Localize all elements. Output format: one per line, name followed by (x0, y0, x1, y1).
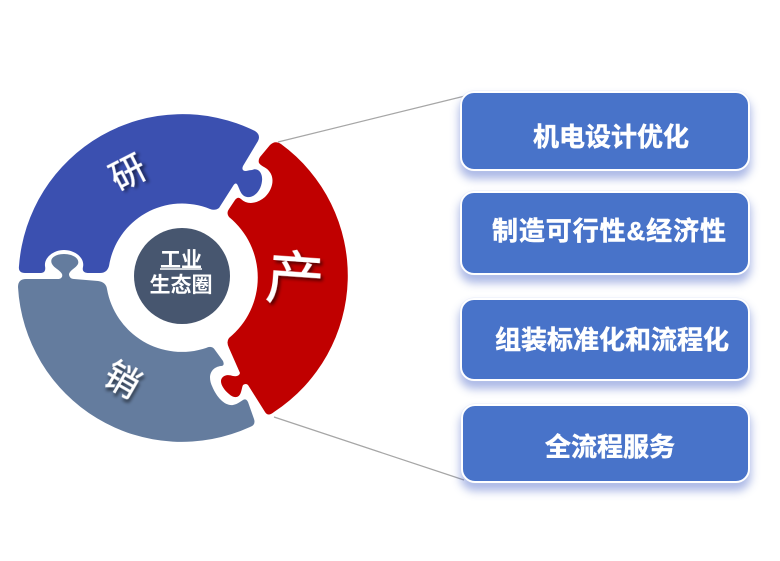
center circle (134, 228, 230, 324)
segment: sales (grey-blue) (18, 254, 254, 442)
card: 机电设计优化: 机电设计优化 (533, 122, 689, 152)
label: 研: 研 (104, 148, 153, 199)
card: 组装标准化和流程化 (460, 298, 750, 381)
center subtitle: 生态圈 (150, 273, 212, 297)
card: 制造可行性&经济性 (460, 191, 750, 275)
segment: research (blue) (19, 114, 262, 273)
label: 销: 销 (97, 355, 147, 406)
card: 组装标准化和流程化: 组装标准化和流程化 (495, 325, 729, 355)
center title: 工业 (160, 249, 202, 272)
connector line top (278, 95, 469, 142)
card: 全流程服务 (461, 404, 750, 483)
segment: production (red) (221, 142, 348, 414)
label: 产: 产 (264, 245, 326, 314)
card: 机电设计优化 (460, 91, 750, 171)
connector line bottom (274, 417, 464, 480)
card: 全流程服务: 全流程服务 (545, 432, 675, 462)
card: 制造可行性&经济性: 制造可行性&经济性 (492, 216, 727, 246)
